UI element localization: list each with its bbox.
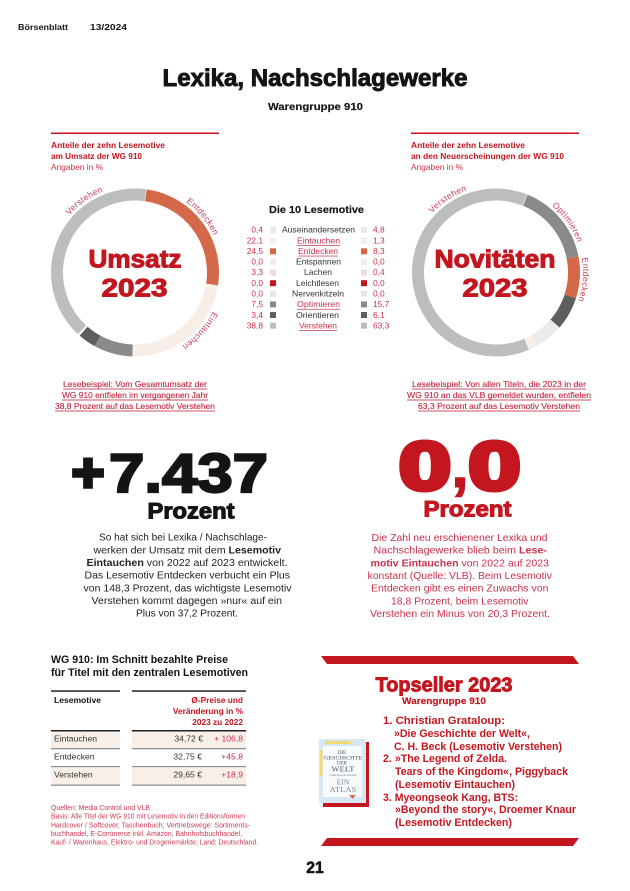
big number (399, 428, 520, 504)
reading example: Novitäten: WG 910 an das VLB gemeldet wurden, entfielen (407, 391, 591, 400)
stat block: 0,0 Prozent (368, 428, 553, 620)
legend right values: 0,0 (373, 257, 385, 267)
legend motive names: Entspannen (296, 257, 341, 267)
explanation text: Nachschlagewerke blieb beim Lese- (374, 546, 548, 557)
table column heads (51, 690, 246, 732)
legend left values: 38,8 (247, 320, 263, 330)
donut labels: Umsatz: Verstehen (65, 188, 102, 214)
donut centre label: Umsatz 2023: 2023 (102, 274, 168, 302)
donut chart: Novitäten (394, 171, 598, 374)
table row: Verstehen: +18,9 (221, 770, 243, 780)
legend right values: 63,3 (373, 320, 390, 330)
book cover: EIN (337, 778, 350, 786)
legend motive names: Entdecken (298, 246, 338, 256)
book cover: ATLAS (330, 786, 357, 794)
table heading: für Titel mit den zentralen Lesemotiven (51, 667, 248, 679)
heading: Novitäten shares: Angaben in % (411, 162, 464, 172)
stat block: +7.437 Prozent (72, 442, 292, 620)
legend right values: 1,3 (373, 235, 385, 245)
legend left values: 22,1 (247, 235, 263, 245)
legend left values: 7,5 (251, 299, 263, 309)
donut labels: Novitäten (428, 186, 590, 302)
donut labels: Umsatz: Eintauchen (182, 312, 218, 349)
bottom banner (321, 838, 579, 846)
topseller list: (Lesemotiv Eintauchen) (395, 779, 515, 791)
explanation text: Eintauchen von 2022 auf 2023 entwickelt. (86, 558, 288, 569)
legend left values: 0,0 (251, 278, 263, 288)
legend motive names: Nervenkitzeln (292, 288, 344, 298)
explanation text: Das Lesemotiv Entdecken verbucht ein Plus (84, 571, 290, 582)
table row: Eintauchen (51, 732, 246, 749)
table row: Eintauchen: 34,72 € (174, 734, 203, 744)
unit: Prozent (148, 498, 235, 524)
reading example: Umsatz: Lesebeispiel: Vom Gesamtumsatz der (63, 380, 207, 389)
topseller list: 1. Christian Grataloup: (383, 715, 505, 727)
donut labels: Umsatz (65, 188, 218, 349)
explanation text (368, 533, 553, 620)
donut labels: Novitäten: Verstehen (428, 186, 466, 212)
big number: 0 (399, 428, 451, 504)
legend right values: 0,0 (373, 278, 385, 288)
big number: , (451, 432, 469, 501)
topseller list: 2. »The Legend of Zelda. (383, 753, 507, 765)
heading: Novitäten shares: an den Neuerscheinungen der WG 910 (411, 151, 564, 161)
table row: Entdecken: Entdecken (54, 752, 95, 762)
donut labels: Novitäten: Entdecken (578, 258, 590, 302)
table column heads: Ø-Preise und (191, 695, 243, 705)
table row: Verstehen (51, 767, 246, 786)
donut chart: Umsatz (47, 184, 223, 361)
donut labels: Umsatz: Entdecken (186, 198, 218, 235)
panel: Novitäten (407, 132, 591, 412)
legend left swatches (270, 227, 276, 329)
donut centre label: Umsatz 2023 (88, 246, 182, 302)
table row: Entdecken: 32,75 € (173, 752, 202, 762)
legend right values: 0,0 (373, 288, 385, 298)
topseller heading (376, 674, 512, 706)
source notes: Quellen: Media Control und VLB (51, 805, 150, 812)
legend left values: 3,3 (251, 267, 263, 277)
legend motive names: Optimieren (297, 299, 340, 309)
donut labels: Novitäten: Optimieren (553, 202, 582, 242)
explanation text: Plus von 37,2 Prozent. (136, 609, 238, 620)
page header: Börsenblatt (18, 22, 68, 32)
topseller list: »Beyond the story«, Droemer Knaur (395, 804, 577, 816)
reading example: Umsatz (55, 380, 215, 411)
reading example: Novitäten: 63,3 Prozent auf das Lesemotiv Verstehen (418, 402, 580, 411)
table heading (51, 654, 248, 679)
source notes: Kauf- / Warenhaus, Elektro- und Drogeriemärkte; Land: Deutschland. (51, 840, 258, 846)
legend left values: 24,5 (247, 246, 263, 256)
heading: Novitäten shares: Anteile der zehn Lesemotive (411, 140, 525, 150)
title: Lexika, Nachschlagewerke (162, 65, 467, 92)
source notes (51, 805, 258, 846)
legend left values: 0,0 (251, 288, 263, 298)
table column heads: Lesemotive (54, 695, 101, 705)
panel: Topseller (319, 656, 579, 846)
topseller list: 3. Myeongseok Kang, BTS: (383, 792, 518, 804)
topseller heading: Warengruppe 910 (402, 696, 486, 706)
table row: Verstehen: Verstehen (54, 770, 93, 780)
book cover (319, 739, 369, 807)
explanation text: Entdecken gibt es einen Zuwachs von (371, 584, 549, 595)
legend motive names: Eintauchen (297, 235, 340, 245)
heading: Novitäten shares (411, 140, 564, 172)
legend right values: 15,7 (373, 299, 390, 309)
legend right values (373, 225, 390, 330)
big number (72, 442, 268, 504)
legend motive names: Leichtlesen (296, 278, 339, 288)
topseller heading: Topseller 2023 (376, 674, 512, 697)
legend right values: 0,4 (373, 267, 385, 277)
legend: Die 10 Lesemotive (247, 205, 390, 331)
legend motive names: Orientieren (296, 310, 339, 320)
legend right values: 4,8 (373, 225, 385, 235)
legend heading: Die 10 Lesemotive (269, 205, 364, 216)
explanation text: Verstehen ein Minus von 20,3 Prozent. (370, 609, 550, 620)
reading example: Novitäten (407, 380, 591, 411)
legend right swatches (361, 227, 367, 329)
topseller list: C. H. Beck (Lesemotiv Verstehen) (394, 741, 562, 753)
book cover: DER (337, 762, 348, 766)
explanation text (84, 533, 292, 620)
legend left values (247, 225, 263, 330)
book cover: CHRISTIAN GRATALOUP (329, 774, 357, 777)
table row: Entdecken: +45,8 (221, 752, 243, 762)
legend motive names (282, 225, 355, 331)
big number: 0 (468, 428, 520, 504)
legend motive names: Verstehen (299, 320, 337, 330)
table column heads: 2023 zu 2022 (192, 717, 243, 727)
reading example: Umsatz: 38,8 Prozent auf das Lesemotiv Verstehen (55, 402, 215, 411)
reading example: Novitäten: Lesebeispiel: Von allen Titeln, die 2023 in der (412, 380, 586, 389)
legend right values: 8,3 (373, 246, 385, 256)
heading: Umsatz shares (51, 140, 165, 172)
explanation text: 18,8 Prozent, beim Lesemotiv (391, 596, 529, 607)
legend left values: 0,0 (251, 257, 263, 267)
book cover: DIE (338, 751, 346, 756)
table heading: WG 910: Im Schnitt bezahlte Preise (51, 654, 228, 666)
page header: 13/2024 (90, 22, 127, 32)
table column heads: Veränderung in % (173, 706, 244, 716)
source notes: Hardcover / Softcover, Taschenbuch; Vertriebswege: Sortiments- (51, 822, 250, 829)
donut centre label: Novitäten 2023: Novitäten (434, 246, 556, 274)
topseller list: Tears of the Kingdom«, Piggyback (395, 766, 569, 778)
book cover: GESCHICHTE (324, 756, 362, 762)
donut centre label: Novitäten 2023: 2023 (462, 274, 528, 302)
page header (18, 22, 127, 32)
book cover: WELT (332, 766, 355, 774)
heading: Umsatz shares: Angaben in % (51, 162, 104, 172)
panel: Umsatz (51, 132, 219, 412)
legend motive names: Auseinandersetzen (282, 225, 355, 235)
page number: 21 (306, 858, 324, 877)
big number: + (72, 442, 104, 504)
legend left values: 3,4 (251, 310, 263, 320)
explanation text: konstant (Quelle: VLB). Beim Lesemotiv (368, 571, 553, 582)
donut centre label: Novitäten 2023 (434, 246, 556, 302)
legend left values: 0,4 (251, 225, 263, 235)
legend right values: 6,1 (373, 310, 385, 320)
table row: Eintauchen: + 106,8 (214, 734, 243, 744)
topseller list (383, 715, 577, 829)
explanation text: von 148,3 Prozent, das wichtigste Lesemotiv (84, 583, 292, 594)
panel: price table (51, 654, 258, 846)
explanation text: Verstehen kommt dagegen »nur« auf ein (92, 596, 282, 607)
source notes: buchhandel, E-Commerce inkl. Amazon, Bahnhofsbuchhandel, (51, 831, 242, 838)
source notes: Basis: Alle Titel der WG 910 mit Lesemotiv in den Editionsformen (51, 814, 245, 821)
heading: Umsatz shares: am Umsatz der WG 910 (51, 151, 142, 161)
explanation text: Die Zahl neu erschienener Lexika und (372, 533, 548, 544)
explanation text: motiv Eintauchen von 2022 auf 2023 (370, 558, 549, 569)
legend motive names: Lachen (304, 267, 332, 277)
reading example: Umsatz: WG 910 entfielen im vergangenen Jahr (62, 391, 208, 400)
donut centre label: Umsatz 2023: Umsatz (88, 246, 182, 274)
big number: 7.437 (109, 442, 268, 504)
explanation text: werken der Umsatz mit dem Lesemotiv (92, 545, 281, 556)
topseller list: (Lesemotiv Entdecken) (395, 817, 512, 829)
subtitle: Warengruppe 910 (268, 102, 363, 113)
unit: Prozent (424, 496, 512, 522)
explanation text: So hat sich bei Lexika / Nachschlage- (99, 533, 267, 544)
topseller list: »Die Geschichte der Welt«, (394, 728, 530, 740)
table row: Entdecken (51, 752, 246, 767)
heading: Umsatz shares: Anteile der zehn Lesemotive (51, 140, 165, 150)
table row: Eintauchen: Eintauchen (54, 734, 97, 744)
top banner (321, 656, 579, 664)
table row: Verstehen: 29,65 € (173, 770, 202, 780)
